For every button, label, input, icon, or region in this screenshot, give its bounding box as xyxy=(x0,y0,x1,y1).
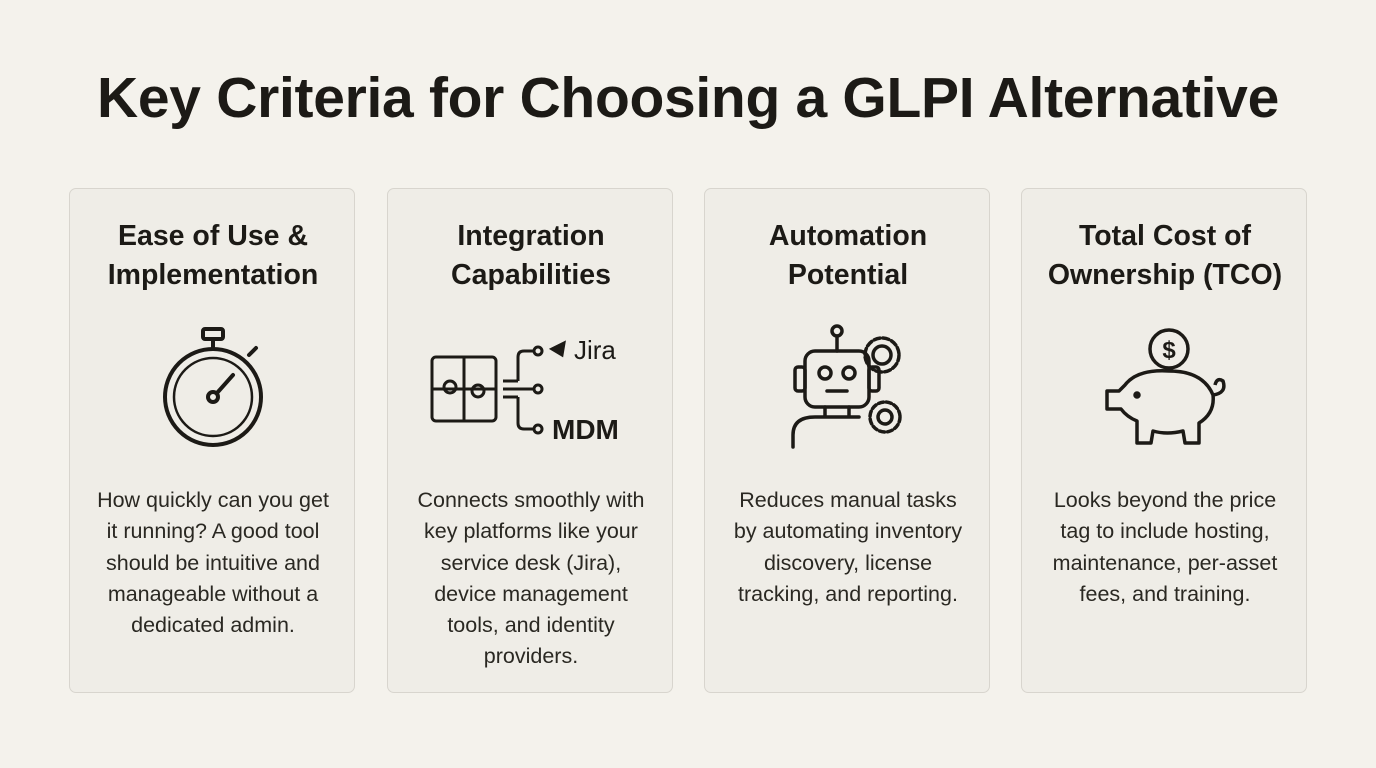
text xyxy=(97,488,329,637)
text: key platforms like your xyxy=(424,519,638,543)
text: tools, and identity xyxy=(447,613,615,637)
heading xyxy=(769,220,927,291)
text: dedicated admin. xyxy=(131,613,295,637)
icon: piggy bank xyxy=(1105,328,1226,445)
heading: Automation xyxy=(769,220,927,252)
icon: puzzle connections: MDM xyxy=(552,414,619,445)
icon: stopwatch xyxy=(163,327,263,447)
text: tag to include hosting, xyxy=(1060,519,1270,543)
text: fees, and training. xyxy=(1080,582,1250,606)
heading xyxy=(108,220,318,291)
heading xyxy=(1048,220,1282,291)
text xyxy=(417,488,645,668)
text: service desk (Jira), xyxy=(441,551,621,575)
text: How quickly can you get xyxy=(97,488,329,512)
text: providers. xyxy=(484,644,578,668)
text: Looks beyond the price xyxy=(1054,488,1276,512)
text: manageable without a xyxy=(108,582,318,606)
heading: Total Cost of xyxy=(1079,220,1251,252)
heading: Capabilities xyxy=(451,259,611,291)
text xyxy=(1053,488,1278,606)
text: Connects smoothly with xyxy=(417,488,645,512)
text: tracking, and reporting. xyxy=(738,582,958,606)
text: device management xyxy=(434,582,628,606)
heading: Integration xyxy=(457,220,605,252)
heading: Implementation xyxy=(108,259,318,291)
title: Key Criteria for Choosing a GLPI Alternative xyxy=(97,66,1279,130)
icon: robot with gears xyxy=(791,324,902,449)
heading: Potential xyxy=(788,259,908,291)
text: by automating inventory xyxy=(734,519,962,543)
text: maintenance, per-asset xyxy=(1053,551,1277,575)
icon: puzzle connections xyxy=(430,335,619,445)
heading xyxy=(451,220,611,291)
text: it running? A good tool xyxy=(107,519,319,543)
icon: piggy bank: $ xyxy=(1162,337,1176,364)
heading: Ownership (TCO) xyxy=(1048,259,1282,291)
panel: ease of use xyxy=(69,188,355,693)
panel: integration xyxy=(387,188,673,693)
text: should be intuitive and xyxy=(106,551,320,575)
panel: automation xyxy=(704,188,990,693)
heading: Ease of Use & xyxy=(118,220,308,252)
text: Reduces manual tasks xyxy=(739,488,957,512)
icon: puzzle connections: Jira xyxy=(574,335,616,365)
text xyxy=(734,488,962,606)
text: discovery, license xyxy=(764,551,932,575)
panel: TCO xyxy=(1021,188,1307,693)
